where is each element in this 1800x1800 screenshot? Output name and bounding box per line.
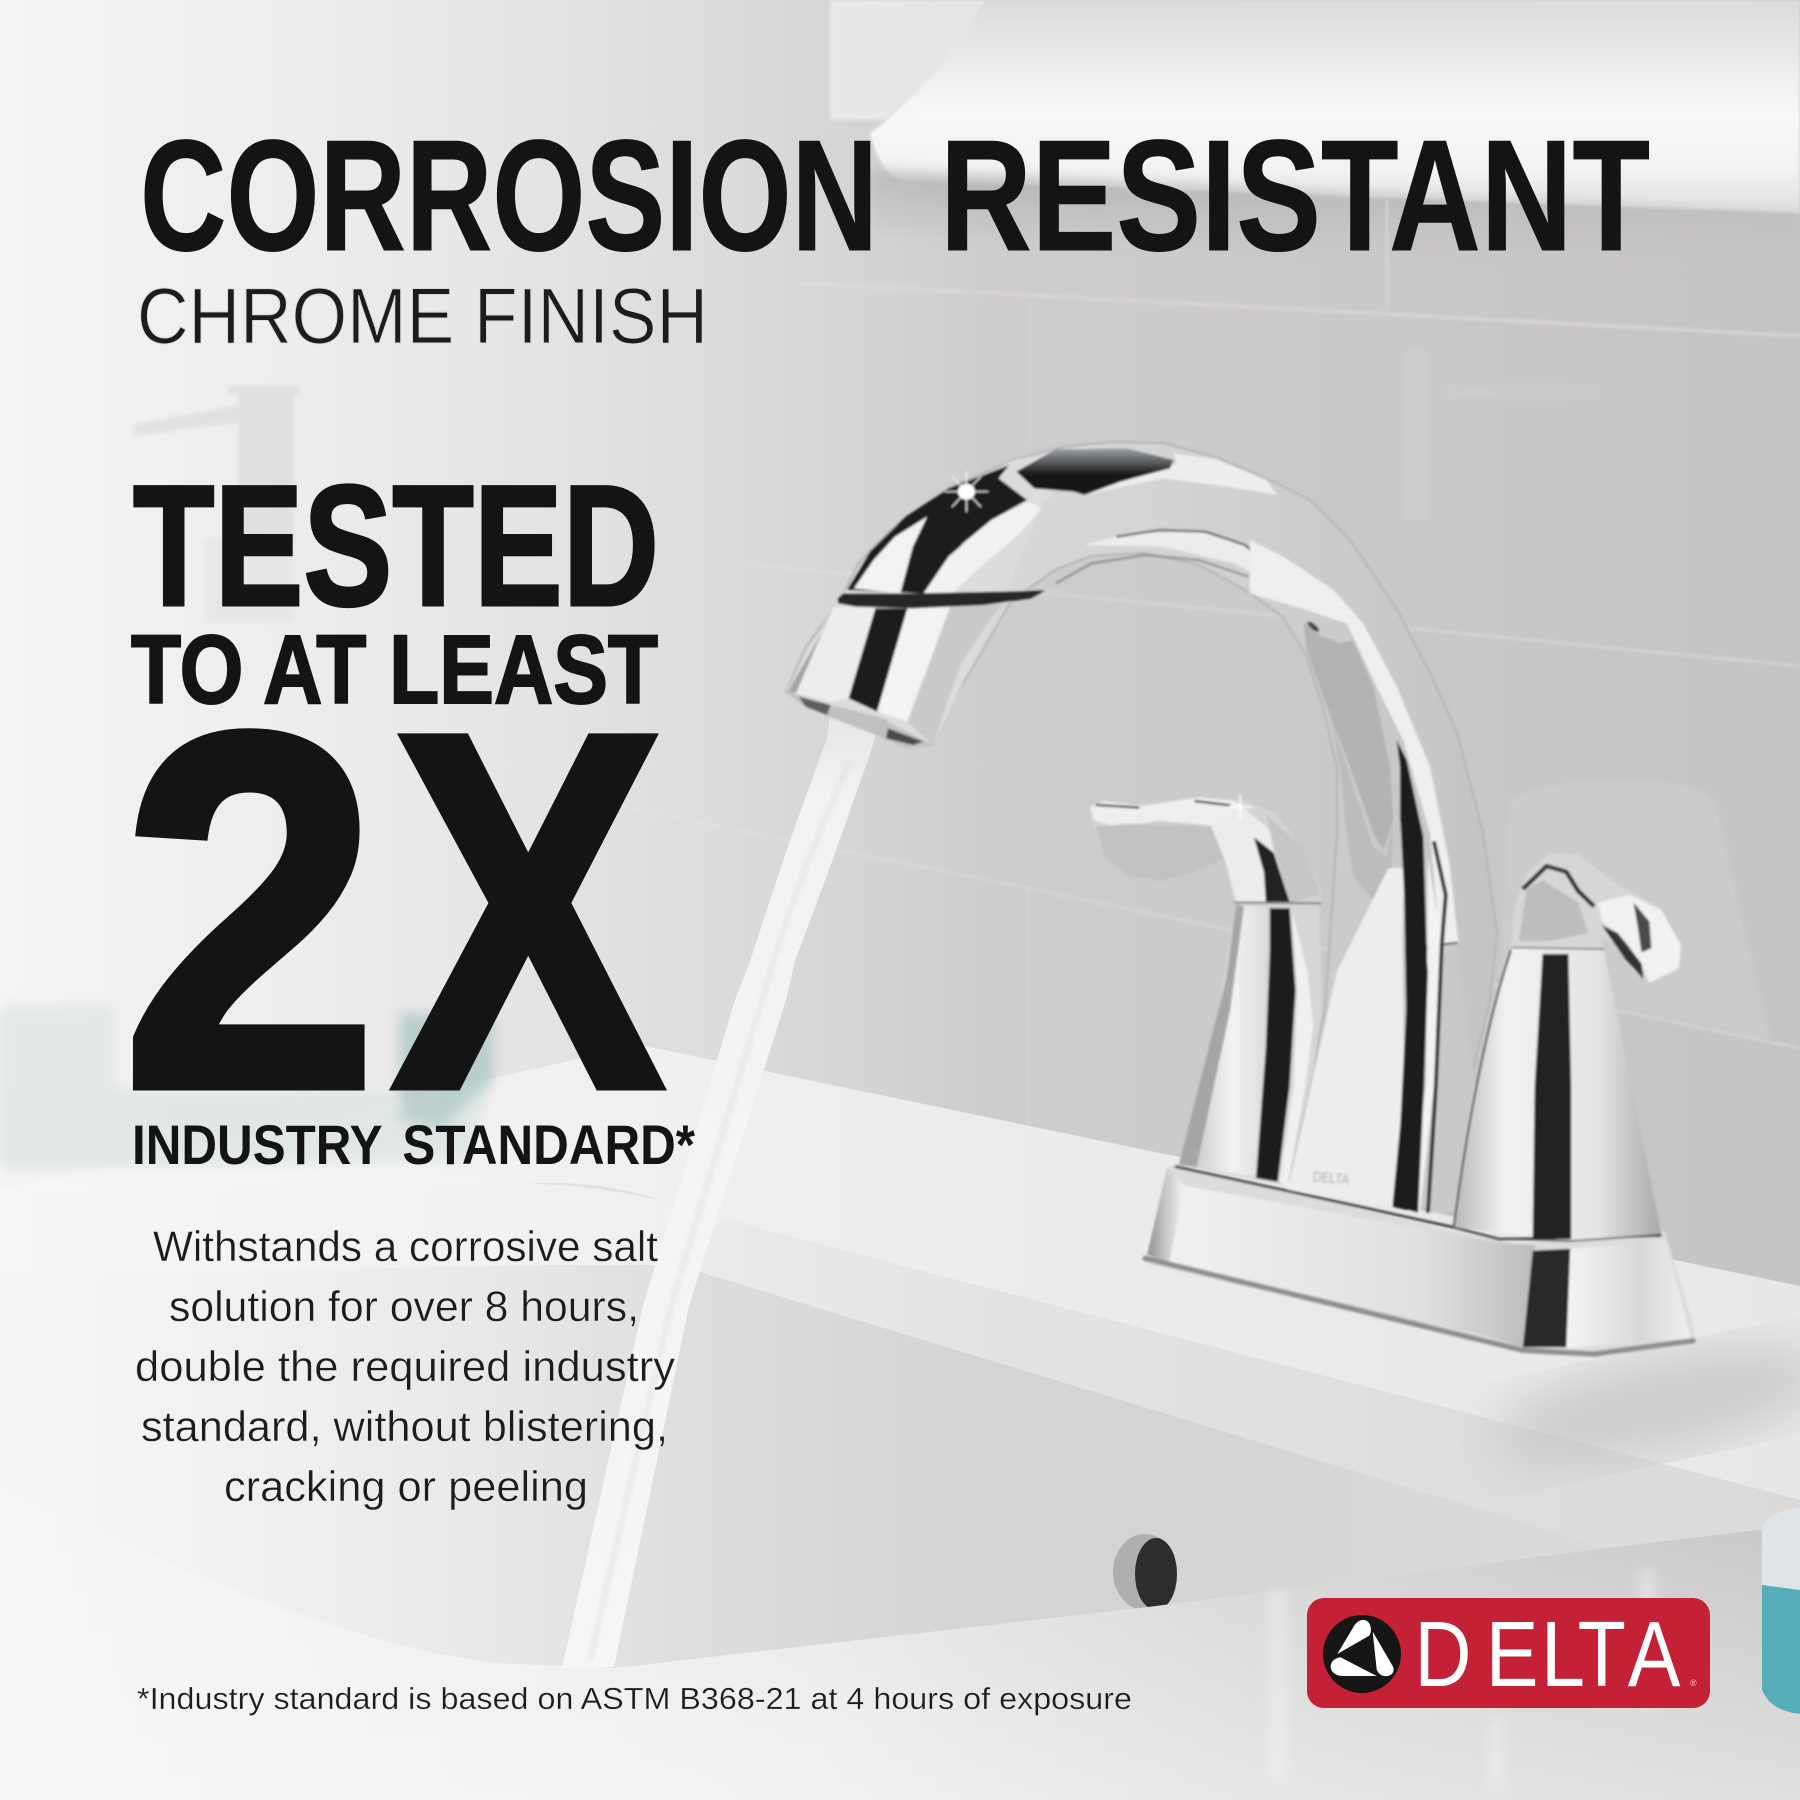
footnote: *Industry standard is based on ASTM B368-21 at 4 hours of exposure <box>137 1681 1132 1716</box>
spout head reflections <box>786 445 1277 748</box>
subtitle: CHROME FINISH <box>137 271 708 360</box>
o-ring seam <box>838 591 1045 608</box>
small DELTA engraving: DELTA <box>1312 1169 1350 1189</box>
description text: Withstands a corrosive salt <box>153 1223 658 1271</box>
water stream <box>562 700 884 1668</box>
logo wordmark: DELTA <box>1414 1603 1681 1706</box>
logo emblem <box>1323 1615 1401 1693</box>
sparkle on spout <box>945 472 988 512</box>
countertop <box>0 1045 1800 1620</box>
heading: industry standard: INDUSTRY STANDARD* <box>132 1113 695 1176</box>
faint reflections on the wall <box>1405 350 1770 1040</box>
nozzle mouth <box>786 692 932 748</box>
description text: standard, without blistering, <box>141 1403 668 1451</box>
heading: to at least: TO AT LEAST <box>131 615 658 724</box>
description text: double the required industry <box>135 1343 675 1391</box>
teal dish blurred behind text <box>0 1005 494 1170</box>
title <box>140 108 1650 284</box>
spout and column silhouette <box>786 442 1497 1216</box>
big number 2X: X <box>392 629 666 1194</box>
big number 2X <box>121 629 666 1194</box>
bottle at right edge <box>1762 1508 1800 1714</box>
upper arch reflections <box>1250 540 1458 1000</box>
title: RESISTANT <box>940 108 1650 284</box>
sink basin <box>0 1265 1700 1800</box>
description text <box>135 1223 675 1511</box>
soap dispenser blurred behind text <box>132 386 300 623</box>
overflow hole <box>1113 1534 1177 1610</box>
left handle <box>1090 795 1322 1186</box>
front sink rim <box>0 1485 1800 1800</box>
heading: tested: TESTED <box>133 450 659 642</box>
description text: cracking or peeling <box>224 1463 588 1511</box>
description text: solution for over 8 hours, <box>169 1283 639 1331</box>
left lever <box>1090 797 1321 903</box>
lever sparkle <box>1228 795 1252 818</box>
column lower section <box>1288 780 1475 1212</box>
base plate <box>1145 1165 1695 1354</box>
shelf above the faucet <box>830 0 1800 275</box>
right lever dome <box>1511 853 1681 983</box>
big number 2X: 2 <box>121 629 379 1194</box>
title: CORROSION <box>140 108 878 284</box>
chrome faucet <box>786 442 1695 1354</box>
registered mark: ® <box>1690 1678 1697 1688</box>
right handle <box>1454 853 1681 1241</box>
wall tile grout lines <box>608 200 1800 1131</box>
Delta logo <box>1307 1598 1710 1708</box>
